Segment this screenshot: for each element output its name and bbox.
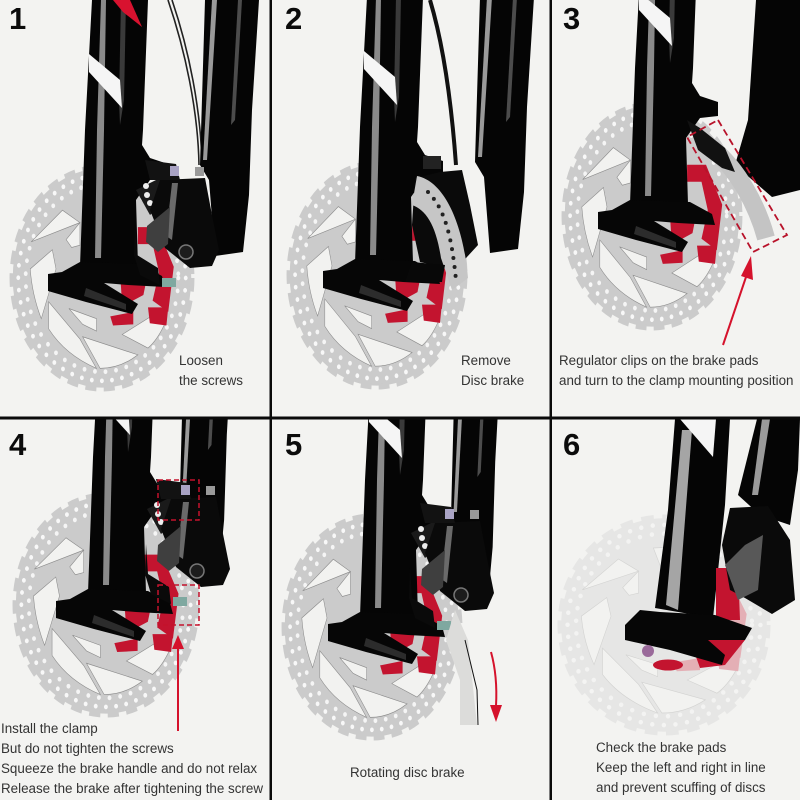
step number 1: 1 — [9, 1, 26, 36]
panel: step 2 — [285, 0, 534, 388]
regulator tool — [446, 610, 477, 725]
right fork leg — [738, 419, 800, 525]
regulator top section — [687, 120, 735, 172]
step number 2: 2 — [285, 1, 302, 36]
panel: step 1 — [9, 0, 259, 389]
dropout lever — [625, 610, 752, 665]
regulator tool — [712, 148, 766, 238]
crescent holes — [428, 192, 456, 280]
left fork highlight — [666, 430, 692, 610]
arrow — [172, 635, 184, 731]
white fork decal — [680, 419, 716, 457]
left fork leg — [598, 0, 718, 252]
fork lower plate — [418, 262, 445, 282]
instruction text: Squeeze the brake handle and do not relax — [1, 761, 257, 776]
left fork leg — [328, 350, 448, 664]
brake rotor — [284, 516, 460, 738]
caliper bracket — [412, 170, 478, 270]
left fork leg — [48, 0, 168, 314]
curved arrow — [490, 652, 502, 722]
right fork leg — [180, 420, 228, 534]
right fork leg — [475, 0, 534, 253]
instruction text: Keep the left and right in line — [596, 760, 766, 775]
panel: step 3 — [559, 0, 800, 388]
caliper — [722, 506, 795, 614]
instruction text: and turn to the clamp mounting position — [559, 373, 793, 388]
instruction text: Loosen — [179, 353, 223, 368]
right fork highlight — [752, 419, 770, 495]
instruction text: Check the brake pads — [596, 740, 727, 755]
step number 3: 3 — [563, 1, 580, 36]
brake pad — [725, 535, 763, 600]
panel: step 5 — [284, 350, 502, 780]
instruction text: Remove — [461, 353, 511, 368]
purple bolt — [642, 645, 654, 657]
caliper — [145, 479, 230, 606]
right fork leg — [451, 352, 501, 608]
panel: step 4 — [2, 420, 264, 796]
dashed highlight — [687, 120, 787, 252]
brake cable — [465, 419, 477, 515]
instruction text: Install the clamp — [1, 721, 98, 736]
step number 5: 5 — [285, 427, 302, 462]
brake rotor — [289, 163, 465, 387]
instruction text: Release the brake after tightening the screw — [1, 781, 263, 796]
right fork leg — [200, 0, 259, 256]
left fork leg — [56, 420, 173, 641]
hub — [716, 568, 740, 620]
dashed highlight lower — [158, 585, 199, 625]
caliper — [134, 160, 219, 287]
red spokes under lever — [690, 640, 745, 668]
instruction text: Regulator clips on the brake pads — [559, 353, 759, 368]
instruction text: the screws — [179, 373, 243, 388]
left fork leg — [655, 419, 730, 618]
arrow — [723, 256, 753, 345]
red hub lower — [653, 660, 683, 670]
right fork leg — [735, 0, 800, 197]
instruction text: But do not tighten the screws — [1, 741, 174, 756]
removed disc brake crescent — [412, 176, 468, 290]
brake cable — [430, 0, 456, 165]
brake rotor — [15, 495, 197, 715]
caliper — [409, 503, 494, 630]
left fork leg — [323, 0, 443, 311]
regulator edge — [465, 640, 478, 725]
red fork decal — [113, 0, 142, 27]
step number 4: 4 — [9, 427, 27, 462]
step number 6: 6 — [563, 427, 580, 462]
dashed highlight upper — [158, 480, 199, 520]
brake adapter bolt — [423, 156, 441, 169]
brake rotor — [564, 104, 740, 328]
faded spinning rotor — [560, 517, 768, 733]
brake cable — [168, 0, 202, 165]
instruction text: Rotating disc brake — [350, 765, 465, 780]
instruction text: and prevent scuffing of discs — [596, 780, 766, 795]
panel: step 6 — [560, 419, 800, 795]
instruction text: Disc brake — [461, 373, 524, 388]
brake rotor — [12, 167, 192, 389]
